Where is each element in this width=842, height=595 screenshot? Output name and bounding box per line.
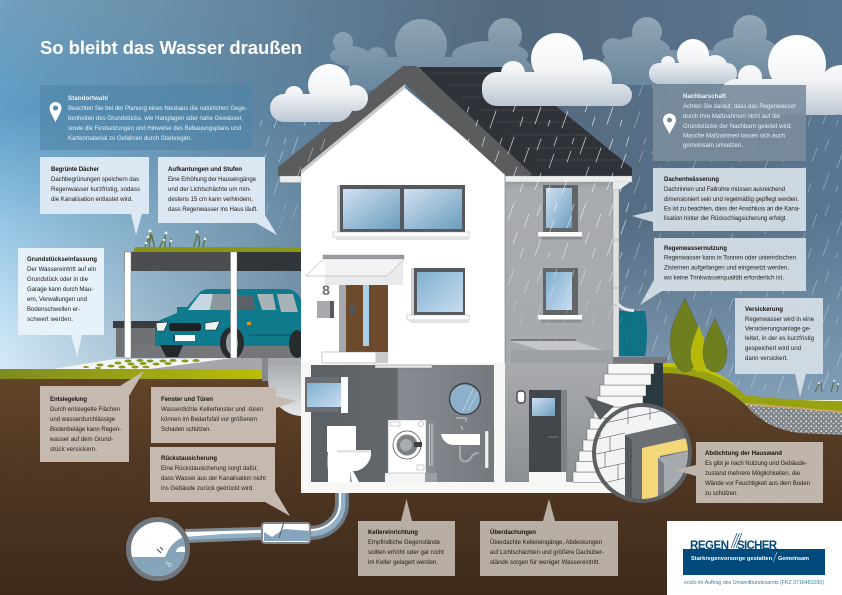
icon: location pin (663, 114, 676, 134)
panel: Fenster und Türen: können im Bedarfsfall vor größerem (161, 416, 257, 423)
panel: Dachentwässerung: Es ist zu beachten, dass der Anschluss an die Kana- (664, 206, 800, 212)
ceiling lamp (375, 365, 432, 368)
panel: Standortwahl: Kartenmaterial zu Gefahren durch Starkregen. (68, 135, 192, 142)
panel: Rückstausicherung: ins Gebäude zurück gedrückt wird. (161, 485, 254, 492)
wall lamp (517, 391, 525, 403)
panel: Versickerung: leitet, in der es kurzfristig (745, 335, 814, 342)
car (155, 289, 305, 359)
panel: Abdichtung der Hauswand: Abdichtung der Hauswand (705, 450, 782, 457)
plants on roof (145, 230, 206, 247)
wash basin (441, 418, 488, 468)
basement door (529, 390, 567, 482)
non-return valve housing (262, 522, 310, 543)
panel: Fenster und Türen (151, 387, 297, 443)
downpipe (613, 182, 630, 358)
panel: Aufkantungen und Stufen: destens 15 cm kann verhindern, (168, 196, 253, 203)
panel: Rückstausicherung: dass Wasser aus der Kanalisation nicht (161, 475, 266, 482)
horizontal pipe (185, 527, 262, 543)
panel: Grundstückseinfassung: Bodenschwellen er- (27, 306, 80, 313)
panel: Dachentwässerung: Dachentwässerung (664, 176, 719, 183)
panel: Regenwassernutzung: wo keine Trinkwasserqualität erforderlich ist. (663, 274, 784, 282)
soil grain texture (0, 373, 842, 595)
panel: Begrünte Dächer: Begrünte Dächer (51, 166, 100, 173)
green roof (133, 247, 301, 252)
panel: Regenwassernutzung (640, 238, 806, 305)
panel: Versickerung: gespeichert wird und (745, 345, 801, 352)
panel: Überdachungen: Überdachungen (490, 529, 536, 536)
panel: Abdichtung der Hauswand (675, 442, 823, 503)
panel: Fenster und Türen: Fenster und Türen (161, 396, 213, 403)
panel: Entsiegelung: stück versickern. (50, 446, 97, 453)
panel: Grundstückseinfassung: Grundstück oder in die (27, 276, 89, 283)
logo panel: Regensicher: Starkregenvorsorge gestalten (691, 556, 773, 562)
panel: Begrünte Dächer: die Kanalisation entlastet wird. (51, 196, 133, 203)
light well (262, 358, 302, 416)
carport floor (131, 345, 301, 358)
toilet (327, 426, 371, 482)
front door (339, 269, 388, 353)
panel: Standortwahl: Beachten Sie bei der Planung eines Neubaus die natürlichen Gege- (68, 105, 247, 112)
infiltration mound with gravel, right (663, 363, 842, 435)
foundation, right (643, 363, 663, 410)
panel: Versickerung (735, 298, 823, 397)
gable underside strip (301, 84, 405, 174)
panel: Grundstückseinfassung: Der Wassereintritt auf ein (27, 266, 96, 273)
panel: Kellereinrichtung: im Keller gelagert werden. (368, 559, 438, 566)
panel: Fenster und Türen: Wasserdichte Kellerfenster und -türen (161, 406, 263, 413)
logo wordmark: REGEN (690, 540, 729, 552)
cloud middle (482, 33, 632, 106)
basement window (301, 363, 348, 423)
white gable wall (301, 88, 505, 363)
mirror (450, 384, 480, 414)
grey house lower window (538, 268, 582, 322)
panel: Standortwahl: Standortwahl (68, 95, 108, 102)
logo panel: Regensicher: Gemeinsam (778, 556, 809, 562)
rain: right side (632, 84, 842, 405)
panel: Versickerung: Versickerungsanlage ge- (745, 326, 811, 332)
plants at the mound (815, 380, 839, 392)
panel: Grundstückseinfassung: ern, Verwallungen und (27, 296, 87, 303)
garage back wall (113, 321, 166, 357)
panel: Begrünte Dächer: Regenwasser kurzfristig, sodass (51, 186, 140, 193)
logo wordmark: SICHER (737, 540, 778, 552)
ground: soil (0, 373, 842, 595)
panel: Nachbarschaft: Manche Maßnahmen lassen sich auch (683, 132, 785, 140)
grey house upper window (538, 185, 582, 240)
cloud right large (720, 35, 842, 115)
panel: Versickerung: Versickerung (745, 306, 783, 313)
concrete slab (613, 357, 667, 363)
logo banner (683, 549, 825, 575)
pipe highlight (310, 493, 340, 530)
panel: Grundstückseinfassung: Grundstückseinfassung (27, 256, 97, 263)
fascia (124, 252, 301, 271)
panel: Nachbarschaft: Achten Sie darauf, dass das Regenwasser (683, 103, 796, 110)
letterbox (317, 301, 334, 318)
panel: Versickerung: dann versickert. (745, 355, 788, 362)
background clouds (330, 15, 777, 90)
eaves (280, 176, 632, 182)
house number: 8 (322, 282, 330, 298)
permeable paving (53, 358, 263, 369)
panel: Standortwahl (40, 85, 252, 150)
panel: Dachentwässerung: Dachrinnen und Fallrohre müssen ausreichend (664, 186, 785, 193)
panel: Regenwassernutzung: Regenwasser kann in Tonnen oder unterirdischen (664, 254, 796, 262)
carport posts (124, 252, 237, 358)
panel: Nachbarschaft: gemeinsam umsetzen. (683, 142, 743, 149)
rain over the roof and grey house (467, 106, 632, 354)
panel: Fenster und Türen: Schaden schützen. (161, 426, 211, 433)
callout pointer to wall detail (585, 396, 614, 420)
panel: Rückstausicherung (150, 447, 290, 516)
vertical drain pipe (310, 493, 342, 533)
manhole circle (128, 520, 188, 583)
panel: Nachbarschaft: Nachbarschaft (683, 93, 726, 100)
panel: Versickerung: Regenwasser wird in eine (745, 316, 815, 323)
panel: Abdichtung der Hauswand: Wände vor Feuchtigkeit aus dem Boden (705, 480, 810, 487)
panel: Standortwahl: sowie die Festsetzungen und Hinweise des Bebauungsplans und (68, 125, 241, 132)
panel: Entsiegelung: Entsiegelung (50, 396, 87, 403)
panel: Entsiegelung: wasser auf dem Grund- (49, 436, 113, 443)
roof tile lines (432, 73, 622, 160)
panel: Dachentwässerung (632, 168, 806, 231)
panel: Abdichtung der Hauswand: zu schützen. (705, 490, 738, 497)
panel: Grundstückseinfassung: Garage kann durch Mau- (27, 286, 93, 293)
house volume (278, 66, 632, 363)
sewer pipe system (128, 493, 342, 583)
basement structure (301, 363, 612, 493)
dark roof (418, 67, 632, 176)
washing machine (385, 420, 437, 482)
upper window: white house (333, 185, 469, 240)
panel: Regenwassernutzung: Zisternen aufgefangen und eingesetzt werden, (664, 264, 789, 272)
logo panel: Regensicher: ecolo im Auftrag des Umweltbundesamts (FKZ 3716481030) (684, 580, 824, 586)
panel: Standortwahl: benheiten des Grundstücks, wie Hanglagen oder nahe Gewässer, (68, 115, 243, 122)
panel: Entsiegelung: und wasserdurchlässige (50, 416, 116, 423)
panel: Regenwassernutzung: Regenwassernutzung (664, 245, 727, 252)
panel: Aufkantungen und Stufen: Aufkantungen und Stufen (168, 166, 242, 173)
small window: white house (407, 268, 469, 323)
panel: Grundstückseinfassung: schwert werden. (27, 316, 73, 323)
left rooms (311, 365, 494, 482)
panel: Überdachungen: stände sorgen für weniger Wassereintritt. (490, 559, 600, 566)
logo panel: Regensicher (667, 521, 842, 595)
logo wordmark (690, 533, 778, 552)
panel: Überdachungen: Überdachte Kellereingänge, Abdeckungen (490, 539, 602, 546)
panel: Abdichtung der Hauswand: Es gibt je nach Nutzung und Gebäude- (705, 460, 807, 467)
panel: Dachentwässerung: dimensioniert sein und regelmäßig gepflegt werden. (664, 196, 799, 203)
panel: Rückstausicherung: Eine Rückstausicherung sorgt dafür, (161, 465, 258, 472)
right room (505, 363, 612, 482)
panel: Rückstausicherung: Rückstausicherung (161, 455, 217, 462)
gable bargeboard (278, 66, 533, 176)
cloud right small (649, 39, 737, 84)
panel: Aufkantungen und Stufen: und der Lichtschächte um min- (168, 186, 251, 193)
panel: Entsiegelung: Durch entsiegelte Flächen (50, 406, 120, 413)
panel: Entsiegelung: Bodenbeläge kann Regen- (50, 426, 121, 433)
panel: Überdachungen: auf Lichtschächten und größere Dachüber- (490, 549, 604, 556)
cloud left (270, 64, 368, 122)
door canopy (306, 255, 404, 285)
door step (322, 352, 388, 363)
background: stormy sky (0, 0, 842, 400)
panel: Entsiegelung (40, 371, 144, 462)
carport (113, 230, 305, 359)
panel: Grundstückseinfassung (18, 248, 104, 357)
panel: Aufkantungen und Stufen: Eine Erhöhung der Hauseingänge (168, 176, 257, 183)
grey house canopy (511, 339, 613, 363)
wall sealing detail circle (592, 405, 692, 505)
panel: Kellereinrichtung: sollten erhöht oder gar nicht (368, 549, 444, 556)
icon: location pin (50, 102, 62, 122)
panel: Nachbarschaft: Grundstücke der Nachbarn geleitet wird. (683, 123, 792, 130)
trees (670, 298, 727, 372)
panel: Nachbarschaft: durch Ihre Maßnahmen nicht auf die (683, 113, 781, 120)
rain barrel (616, 300, 647, 356)
panel: Kellereinrichtung (358, 499, 455, 576)
panel: Überdachungen (480, 499, 618, 576)
panel: Begrünte Dächer: Dachbegrünungen speichern das (51, 176, 139, 183)
panel: Begrünte Dächer (40, 157, 149, 235)
panel: Dachentwässerung: lisation hinter der Rückschlagsicherung erfolgt. (664, 215, 787, 222)
outdoor stairs (573, 364, 654, 482)
panel: Aufkantungen und Stufen: dass Regenwasser ins Haus läuft. (168, 206, 258, 213)
panel: Kellereinrichtung: Empfindliche Gegenstände (368, 539, 441, 546)
panel: Abdichtung der Hauswand: zustand mehrere Möglichkeiten, die (705, 470, 801, 477)
panel: Aufkantungen und Stufen (158, 157, 277, 235)
panel: Kellereinrichtung: Kellereinrichtung (368, 529, 418, 536)
rain over cloud A area (256, 120, 326, 242)
pipe water (310, 493, 342, 533)
grey house (505, 178, 613, 363)
wall edge (504, 172, 506, 363)
lawn strip, left (0, 369, 263, 379)
title: So bleibt das Wasser draußen (40, 37, 302, 58)
panel: Nachbarschaft (653, 85, 806, 161)
basement walls (301, 363, 612, 493)
